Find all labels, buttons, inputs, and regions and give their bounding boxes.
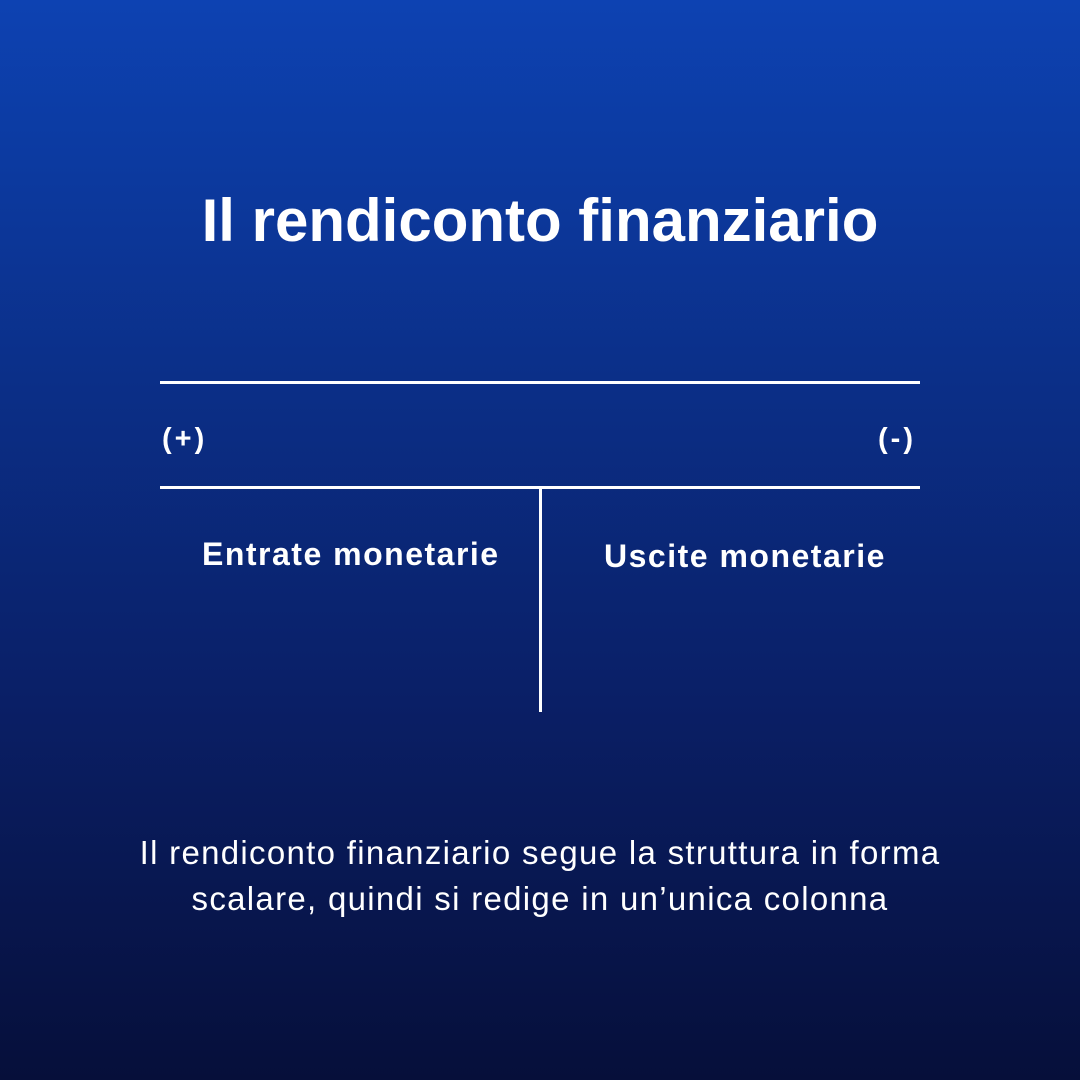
plus sign label: (+) <box>162 423 207 455</box>
description text: scalare, quindi si redige in un’unica colonna <box>192 880 888 917</box>
minus sign label: (-) <box>878 423 916 455</box>
description text <box>140 834 940 917</box>
title: Il rendiconto finanziario <box>202 187 878 254</box>
entrate label: Entrate monetarie <box>202 536 500 572</box>
vertical divider <box>539 489 542 712</box>
uscite label: Uscite monetarie <box>604 538 886 574</box>
top line <box>160 381 920 384</box>
middle line <box>160 486 920 489</box>
table diagram <box>160 381 920 712</box>
description text: Il rendiconto finanziario segue la struttura in forma <box>140 834 940 871</box>
